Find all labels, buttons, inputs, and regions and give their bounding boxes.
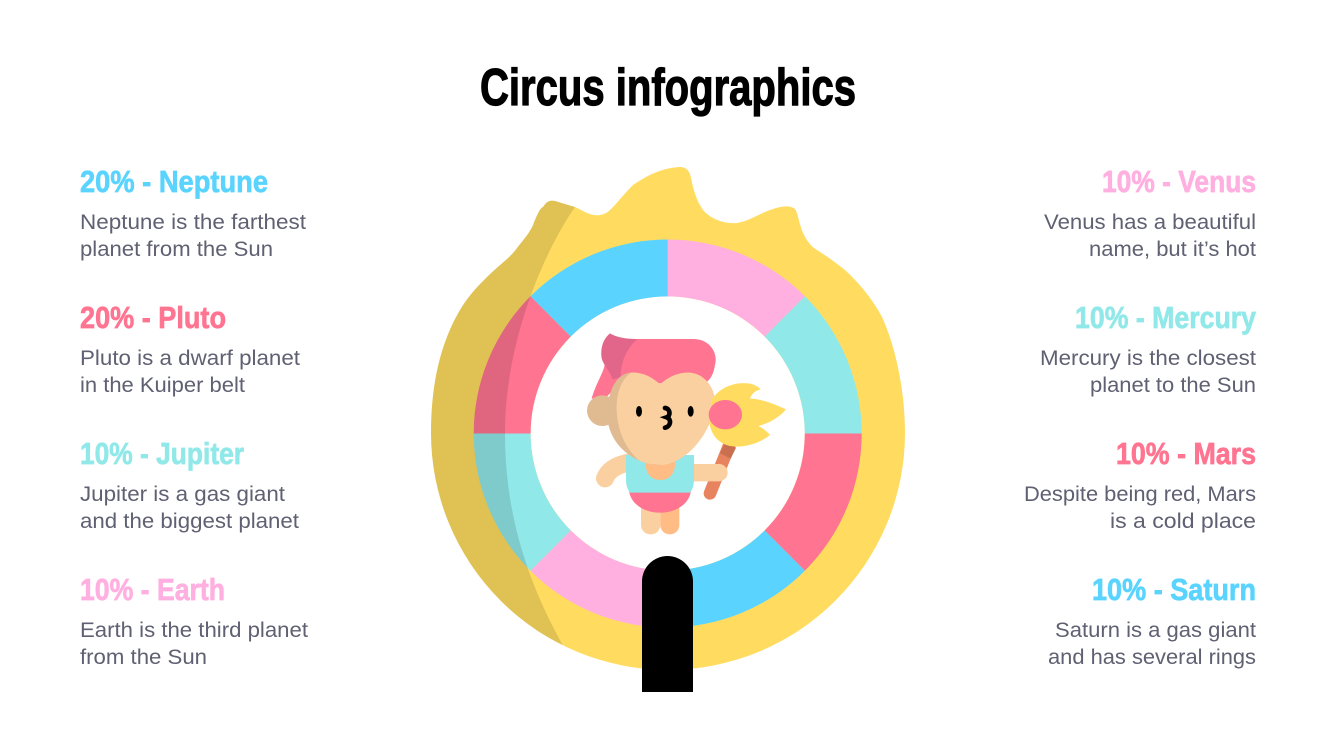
right arm	[692, 447, 719, 499]
legend item: Neptune	[80, 164, 306, 261]
hoop stand	[642, 556, 693, 692]
legend item: Earth: 10% - Earth	[80, 572, 225, 607]
legend item: Mercury: 10% - Mercury	[1075, 300, 1257, 335]
segment: aqua, left lower	[474, 434, 571, 571]
ear	[587, 395, 618, 426]
legend item: Mercury: planet to the Sun	[1090, 373, 1256, 397]
torch stick	[710, 445, 731, 493]
legend item: Mercury	[1040, 300, 1257, 397]
legend item: Earth: from the Sun	[80, 645, 207, 669]
segment: aqua, right upper	[765, 296, 862, 434]
legend item: Pluto: Pluto is a dwarf planet	[80, 346, 300, 370]
legend item: Saturn: 10% - Saturn	[1092, 572, 1256, 607]
segment: pink, bottom left	[530, 530, 668, 628]
legend item: Saturn	[1048, 572, 1256, 669]
title: Circus infographics	[480, 59, 856, 117]
hair	[592, 333, 716, 400]
face	[636, 406, 694, 428]
neck	[645, 462, 675, 480]
legend item: Saturn: and has several rings	[1048, 645, 1256, 669]
legend item: Pluto: in the Kuiper belt	[80, 373, 245, 397]
legend item: Venus: Venus has a beautiful	[1044, 210, 1256, 234]
torch head	[709, 400, 742, 429]
chart: flaming hoop donut	[431, 167, 905, 668]
left arm	[605, 463, 628, 478]
donut segments	[474, 240, 862, 628]
legend item: Mars: is a cold place	[1110, 509, 1256, 533]
legend item: Mercury: Mercury is the closest	[1040, 346, 1256, 370]
inner white circle	[531, 296, 805, 570]
top	[626, 455, 694, 493]
legend item: Jupiter	[80, 436, 299, 533]
segment: coral, left upper	[474, 296, 571, 434]
segment: coral, right lower	[765, 434, 862, 571]
legend item: Neptune: Neptune is the farthest	[80, 210, 306, 234]
hoop left shading	[431, 200, 575, 645]
legend item: Venus: 10% - Venus	[1102, 164, 1256, 199]
flame hoop	[431, 167, 905, 670]
legend item: Saturn: Saturn is a gas giant	[1055, 618, 1256, 642]
shorts	[629, 490, 691, 513]
legend item: Neptune: planet from the Sun	[80, 237, 273, 261]
legend item: Jupiter: and the biggest planet	[80, 509, 299, 533]
segment: blue, bottom right	[668, 530, 805, 628]
legend item: Venus	[1044, 164, 1256, 261]
legend item: Mars: 10% - Mars	[1116, 436, 1256, 471]
legend item: Mars: Despite being red, Mars	[1024, 482, 1256, 506]
panel: left column legend	[80, 164, 308, 669]
legend item: Neptune: 20% - Neptune	[80, 164, 268, 199]
icon: circus performer with torch	[587, 333, 786, 534]
legend item: Pluto	[80, 300, 300, 397]
segment: pink, top right	[668, 240, 805, 337]
head	[608, 372, 714, 465]
legs	[641, 500, 679, 534]
panel: right column legend	[1024, 164, 1257, 669]
legend item: Jupiter: 10% - Jupiter	[80, 436, 244, 471]
legend item: Pluto: 20% - Pluto	[80, 300, 226, 335]
legend item: Venus: name, but it’s hot	[1089, 237, 1256, 261]
segment: blue, top left	[530, 240, 668, 337]
torch flame	[709, 383, 786, 447]
legend item: Jupiter: Jupiter is a gas giant	[80, 482, 285, 506]
legend item: Earth	[80, 572, 308, 669]
legend item: Earth: Earth is the third planet	[80, 618, 308, 642]
legend item: Mars	[1024, 436, 1256, 533]
